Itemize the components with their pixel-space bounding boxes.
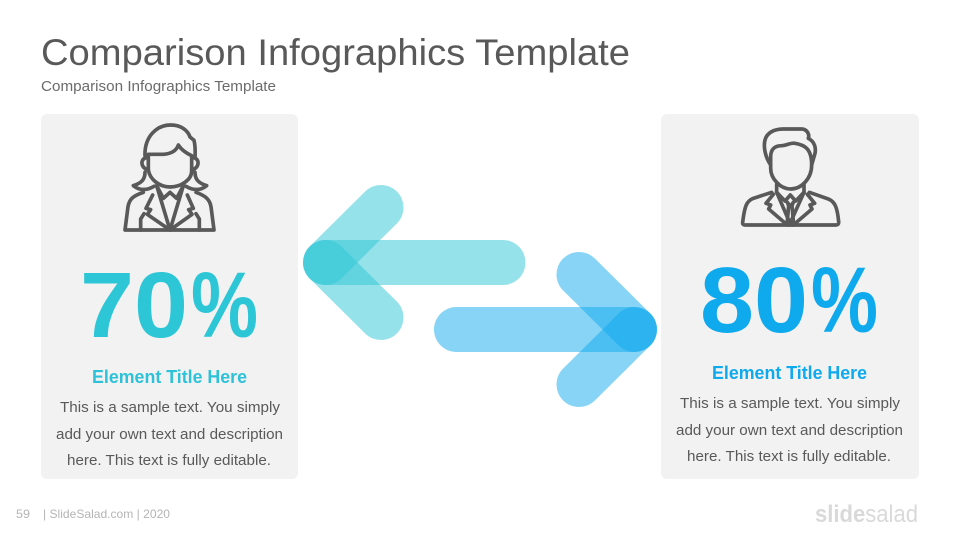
logo: slidesalad: slidesalad (815, 501, 918, 528)
stat: 80% (700, 248, 878, 352)
text block: here. This text is fully editable. (687, 449, 891, 465)
arrow: pointing left (326, 208, 503, 318)
footer: page number: 59 (16, 507, 30, 521)
arrow: pointing right (456, 274, 634, 384)
text block: add your own text and description (56, 427, 283, 443)
icon: businesswoman (125, 125, 214, 230)
element title: Element Title Here (92, 367, 247, 387)
stat: 70%: % (191, 253, 258, 357)
panel: right comparison card (661, 114, 919, 479)
stat: 80%: 80 (700, 248, 808, 352)
subtitle: Comparison Infographics Template (41, 79, 276, 95)
panel: left comparison card (41, 114, 298, 479)
icon: businessman (743, 129, 839, 225)
element title: Element Title Here (712, 363, 867, 383)
stat: 70%: 70 (80, 253, 188, 357)
text block: This is a sample text. You simply (680, 396, 901, 412)
stat: 80%: % (811, 248, 878, 352)
stat: 70% (80, 253, 258, 357)
title: Comparison Infographics Template (41, 32, 630, 73)
text block: This is a sample text. You simply (60, 400, 281, 416)
text block: here. This text is fully editable. (67, 453, 271, 469)
text block: add your own text and description (676, 423, 903, 439)
text block (676, 396, 903, 465)
text block (56, 400, 283, 469)
footer: source text: | SlideSalad.com | 2020 (43, 507, 170, 521)
